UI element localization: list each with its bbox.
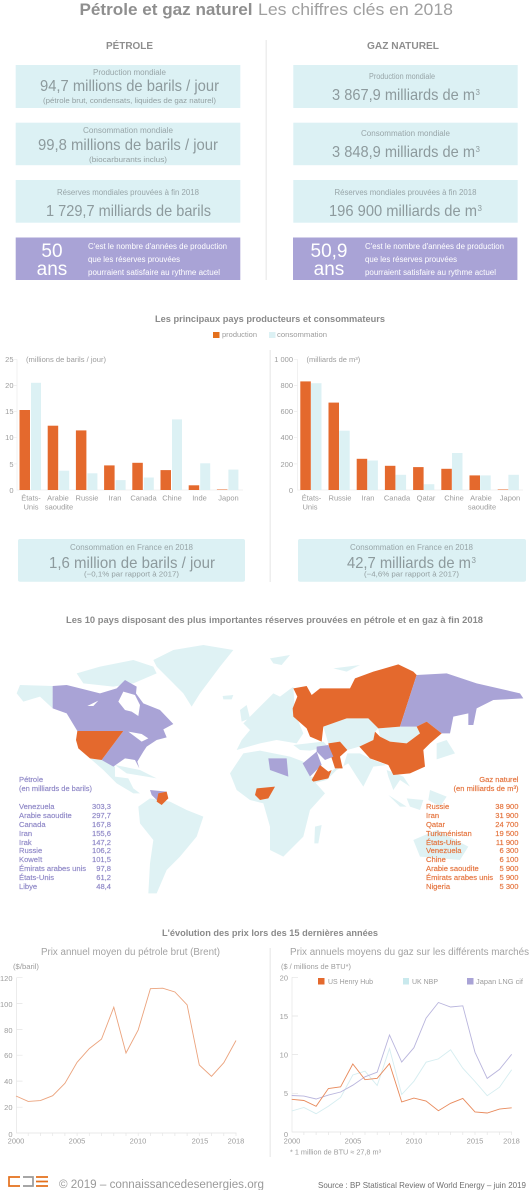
bar chart: gaz: Qatar: [417, 494, 436, 502]
line chart: gaz: Prix annuels moyens du gaz sur les différents marchés: [290, 947, 529, 958]
heading: évolution des prix: L'évolution des prix lors des 15 dernières années: [162, 928, 378, 939]
heading: producteurs et consommateurs: Les principaux pays producteurs et consommateurs: [155, 314, 385, 325]
title: Les chiffres clés en 2018: [258, 0, 453, 19]
panel: consommation France gaz: (−4,6% par rapport à 2017): [364, 570, 460, 578]
panel: production mondiale gaz: 3: [476, 88, 480, 97]
panel: 50,9 ans: [293, 238, 517, 280]
panel: consommation France pétrole: [18, 539, 245, 582]
legend table: pétrole: Irak: [19, 838, 32, 847]
panel: réserves gaz: 196 900 milliards de m: [329, 203, 477, 220]
legend table: pétrole: Émirats arabes unis: [19, 864, 86, 873]
legend table: pétrole: 155,6: [92, 829, 111, 838]
bar chart: gaz: Japon: [500, 494, 520, 502]
legend: marchés du gaz: Japan LNG cif: [476, 977, 524, 986]
line chart: gaz: 0: [284, 1130, 288, 1139]
world map: [17, 645, 523, 893]
line chart: Brent: 2018: [228, 1136, 244, 1146]
legend table: pétrole: Pétrole: [19, 775, 43, 784]
legend table: gaz naturel: 5 900: [499, 864, 518, 873]
line chart: gaz: 2018: [503, 1136, 520, 1146]
legend table: gaz naturel: Chine: [426, 855, 446, 864]
panel: 50 ans: pourraient satisfaire au rythme actuel: [88, 268, 220, 277]
legend: marchés du gaz: UK NBP: [412, 977, 438, 986]
line chart: gaz: ($ / millions de BTU*): [281, 962, 351, 971]
panel: 50 ans: que les réserves prouvées: [88, 255, 180, 264]
bar chart: pétrole: (millions de barils / jour): [26, 355, 106, 364]
bar chart: pétrole: Chine: [162, 494, 182, 502]
panel: consommation mondiale pétrole: (biocarburants inclus): [89, 155, 168, 164]
panel: réserves gaz: 3: [478, 204, 482, 213]
line chart: Brent: 2015: [192, 1136, 208, 1146]
panel: consommation mondiale pétrole: 99,8 millions de barils / jour: [38, 137, 219, 154]
heading: pétrole: PÉTROLE: [106, 39, 153, 52]
legend table: pétrole: Venezuela: [19, 802, 55, 811]
panel: consommation mondiale pétrole: Consommation mondiale: [83, 126, 174, 135]
line chart: Brent: 120: [0, 974, 12, 983]
bar chart: gaz: [274, 355, 523, 512]
line chart: gaz: [280, 947, 529, 1156]
bar chart: pétrole: Inde: [192, 494, 207, 502]
legend table: pétrole: États-Unis: [19, 873, 54, 882]
bar chart: pétrole: États-: [21, 494, 41, 502]
bar chart: pétrole: 10: [5, 433, 14, 442]
panel: 50 ans: C'est le nombre d'années de production: [88, 242, 227, 251]
legend: marchés du gaz: [318, 977, 524, 986]
bar chart: pétrole: Canada: [130, 494, 157, 502]
legend table: gaz naturel: Nigeria: [426, 882, 451, 891]
title: Pétrole et gaz naturel: [80, 0, 252, 19]
legend table: gaz naturel: Venezuela: [426, 846, 462, 855]
panel: consommation France pétrole: 1,6 million de barils / jour: [49, 555, 216, 572]
legend table: pétrole: 167,8: [92, 820, 111, 829]
panel: consommation mondiale gaz: [293, 123, 518, 165]
bar chart: gaz: 400: [280, 433, 293, 442]
panel: production mondiale pétrole: (pétrole brut, condensats, liquides de gaz naturel): [43, 96, 217, 105]
bar chart: pétrole: Iran: [109, 494, 121, 502]
bar chart: pétrole: Unis: [23, 502, 39, 512]
bar chart: gaz: Arabie: [470, 494, 492, 502]
panel: consommation France pétrole: (−0,1% par rapport à 2017): [84, 570, 180, 578]
line chart: Brent: 80: [4, 1026, 12, 1035]
heading: réserves: Les 10 pays disposant des plus importantes réserves prouvées en pétrole et en gaz à fin 2018: [66, 615, 483, 626]
panel: production mondiale pétrole: Production mondiale: [93, 68, 167, 77]
legend table: gaz naturel: (en milliards de m³): [454, 784, 519, 793]
legend table: gaz naturel: 6 100: [499, 855, 518, 864]
legend: production / consommation: [213, 330, 327, 339]
legend table: pétrole: Arabie saoudite: [19, 811, 72, 820]
legend table: gaz naturel: 5 300: [499, 882, 518, 891]
line chart: Brent: 2010: [130, 1136, 146, 1146]
line chart: gaz: 10: [280, 1050, 288, 1060]
line chart: Brent: 60: [4, 1051, 12, 1060]
line chart: Brent: [0, 947, 244, 1146]
bar chart: gaz: États-: [302, 494, 322, 502]
panel: consommation mondiale gaz: Consommation mondiale: [361, 129, 451, 138]
legend table: pétrole: 106,2: [92, 846, 111, 855]
heading: gaz naturel: GAZ NATUREL: [367, 40, 440, 52]
bar chart: gaz: saoudite: [468, 502, 496, 512]
line chart: gaz: 2005: [345, 1136, 361, 1146]
bar chart: gaz: (milliards de m³): [306, 355, 361, 364]
divider: [270, 948, 271, 1157]
bar chart: gaz: 800: [280, 381, 293, 390]
legend table: gaz naturel: [426, 775, 519, 891]
line chart: Brent: 100: [0, 1000, 12, 1009]
panel: production mondiale gaz: [293, 65, 518, 108]
bar chart: pétrole: 15: [5, 407, 14, 416]
legend table: gaz naturel: États-Unis: [426, 838, 461, 847]
legend table: pétrole: 101,5: [92, 855, 111, 864]
line chart: gaz: * 1 million de BTU ≈ 27,8 m³: [290, 1148, 381, 1156]
bar chart: gaz: Russie: [329, 494, 351, 502]
bar chart: gaz: Chine: [444, 494, 464, 502]
panel: consommation France gaz: 42,7 milliards de m: [347, 555, 471, 572]
panel: 50,9 ans: C'est le nombre d'années de production: [365, 242, 504, 251]
line chart: gaz: 20: [280, 974, 288, 982]
legend table: pétrole: 97,8: [96, 864, 111, 873]
panel: 50,9 ans: 50,9: [311, 241, 347, 262]
legend table: pétrole: Russie: [19, 846, 42, 855]
legend table: pétrole: Koweït: [19, 855, 43, 864]
panel: 50 ans: ans: [37, 259, 67, 280]
line chart: gaz: 5: [284, 1089, 288, 1098]
legend table: gaz naturel: 19 500: [495, 829, 518, 838]
panel: consommation France pétrole: Consommation en France en 2018: [70, 543, 194, 552]
bar chart: pétrole: Russie: [76, 494, 98, 502]
line chart: Brent: 0: [8, 1130, 12, 1139]
legend table: gaz naturel: Turkménistan: [426, 829, 472, 838]
legend table: gaz naturel: Arabie saoudite: [426, 864, 479, 873]
panel: production mondiale pétrole: 94,7 millions de barils / jour: [40, 78, 220, 95]
bar chart: pétrole: Japon: [218, 494, 239, 502]
bar chart: pétrole: saoudite: [45, 502, 73, 512]
logo: [9, 1177, 48, 1186]
Amérique du Sud: [138, 790, 203, 893]
line chart: Brent: ($/baril): [13, 962, 39, 971]
panel: 50 ans: [16, 238, 240, 280]
bar chart: gaz: 0: [289, 486, 293, 495]
panel: 50 ans: 50: [41, 241, 63, 262]
panel: réserves gaz: [293, 180, 518, 223]
panel: production mondiale gaz: Production mondiale: [369, 72, 435, 81]
legend table: pétrole: (en milliards de barils): [19, 784, 92, 793]
panel: 50,9 ans: pourraient satisfaire au rythme actuel: [365, 268, 496, 277]
legend: production / consommation: production: [222, 330, 257, 339]
panel: consommation mondiale gaz: 3 848,9 milliards de m: [332, 144, 475, 161]
legend: production / consommation: consommation: [277, 330, 327, 339]
legend table: gaz naturel: 24 700: [495, 820, 518, 829]
line chart: Brent: 2005: [69, 1136, 85, 1146]
bar chart: gaz: 1 000: [274, 355, 293, 364]
bar chart: gaz: 600: [280, 407, 293, 416]
bar chart: pétrole: 5: [9, 460, 14, 469]
line chart: Brent: 2000: [8, 1136, 24, 1146]
bar chart: gaz: 200: [280, 460, 293, 469]
bar chart: gaz: Unis: [302, 502, 318, 512]
panel: réserves gaz: Réserves mondiales prouvées à fin 2018: [334, 188, 477, 197]
legend table: gaz naturel: Émirats arabes unis: [426, 873, 493, 882]
bar chart: gaz: Canada: [384, 494, 411, 502]
line chart: gaz: 2015: [467, 1136, 483, 1146]
title: [80, 0, 453, 19]
panel: consommation France gaz: [298, 539, 526, 582]
panel: réserves pétrole: Réserves mondiales prouvées à fin 2018: [57, 188, 200, 197]
legend table: pétrole: 48,4: [96, 882, 111, 891]
divider: [270, 350, 271, 582]
line chart: Brent: 40: [4, 1077, 12, 1086]
bar chart: pétrole: Arabie: [47, 494, 69, 502]
Eurasie, Afrique, Océanie: [230, 655, 523, 860]
panel: 50,9 ans: ans: [314, 259, 344, 280]
bar chart: pétrole: [5, 355, 243, 512]
panel: production mondiale pétrole: [16, 65, 240, 108]
legend table: pétrole: Libye: [19, 882, 37, 891]
legend table: gaz naturel: Iran: [426, 811, 439, 820]
Amérique du Nord: [17, 645, 233, 793]
line chart: Brent: 20: [4, 1103, 12, 1112]
line chart: Brent: Prix annuel moyen du pétrole brut (Brent): [41, 947, 220, 958]
line chart: gaz: 2000: [284, 1136, 300, 1146]
legend table: pétrole: 303,3: [92, 802, 111, 811]
line chart: gaz: 15: [280, 1012, 288, 1021]
legend table: pétrole: 147,2: [92, 838, 111, 847]
legend table: pétrole: 297,7: [92, 811, 111, 820]
legend table: pétrole: Canada: [19, 820, 46, 829]
legend table: gaz naturel: 38 900: [495, 802, 518, 811]
divider: [266, 40, 267, 280]
panel: 50,9 ans: que les réserves prouvées: [365, 255, 457, 264]
panel: production mondiale gaz: 3 867,9 milliards de m: [332, 87, 475, 104]
panel: réserves pétrole: 1 729,7 milliards de barils: [46, 203, 211, 220]
legend table: gaz naturel: 31 900: [495, 811, 518, 820]
legend: marchés du gaz: US Henry Hub: [328, 977, 373, 986]
line chart: gaz: 2010: [406, 1136, 422, 1146]
bar chart: gaz: Iran: [362, 494, 374, 502]
legend table: gaz naturel: Gaz naturel: [479, 775, 519, 784]
legend table: pétrole: [19, 775, 111, 891]
bar chart: pétrole: 25: [5, 355, 14, 364]
legend table: gaz naturel: Qatar: [426, 820, 445, 829]
panel: réserves pétrole: [16, 180, 240, 223]
bar chart: pétrole: 20: [5, 381, 14, 390]
legend table: gaz naturel: 11 900: [496, 838, 518, 847]
legend table: pétrole: 61,2: [96, 873, 111, 882]
legend table: gaz naturel: 5 900: [499, 873, 518, 882]
legend table: gaz naturel: 6 300: [499, 846, 518, 855]
bar chart: pétrole: 0: [9, 486, 14, 495]
panel: consommation mondiale pétrole: [16, 123, 240, 165]
panel: consommation mondiale gaz: 3: [476, 145, 480, 154]
legend table: gaz naturel: Russie: [426, 802, 449, 811]
panel: consommation France gaz: Consommation en France en 2018: [350, 543, 474, 552]
panel: consommation France gaz: 3: [472, 556, 476, 565]
legend table: pétrole: Iran: [19, 829, 32, 838]
